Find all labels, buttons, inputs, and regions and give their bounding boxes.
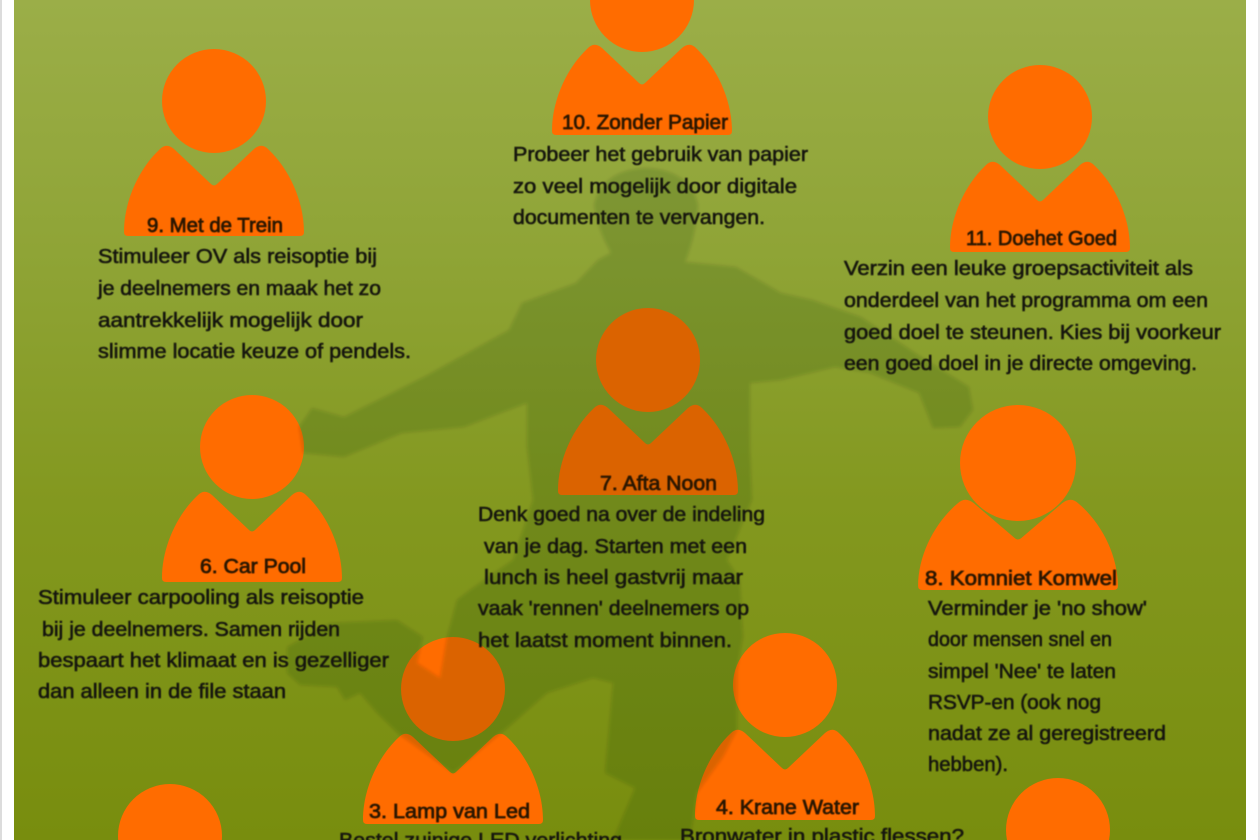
icon: person 9 <box>124 49 304 236</box>
text: tip 8: Verminder je 'no show' <box>928 598 1147 620</box>
text: tip 11 <box>844 258 1221 375</box>
text: tip 10: documenten te vervangen. <box>513 207 765 229</box>
text: tip 6: dan alleen in de file staan <box>38 681 286 703</box>
heading: 4. Krane Water: 4. Krane Water <box>716 797 859 819</box>
icon: person 10 <box>552 0 732 135</box>
text: tip 6: Stimuleer carpooling als reisoptie <box>38 587 364 609</box>
text: tip 7: Denk goed na over de indeling <box>478 504 765 526</box>
text: tip 8: RSVP-en (ook nog <box>928 692 1101 714</box>
heading: 3. Lamp van Led: 3. Lamp van Led <box>369 801 530 823</box>
text: tip 8: hebben). <box>928 754 1008 776</box>
text: tip 6: bespaart het klimaat en is gezelliger <box>38 650 389 672</box>
icon: person bottom left <box>118 784 222 840</box>
text: tip 9: je deelnemers en maak het zo <box>97 278 381 300</box>
silhouette: jumping figure <box>287 168 973 840</box>
heading: 7. Afta Noon: 7. Afta Noon <box>600 473 717 495</box>
text: tip 11: Verzin een leuke groepsactiviteit als <box>844 258 1193 280</box>
text: tip 10: Probeer het gebruik van papier <box>513 144 808 166</box>
text: tip 7: het laatst moment binnen. <box>478 630 732 652</box>
icon: person 8 <box>918 405 1118 590</box>
text: tip 9: aantrekkelijk mogelijk door <box>98 310 363 332</box>
text: tip 11: een goed doel in je directe omgeving. <box>844 353 1197 375</box>
text: tip 8: simpel 'Nee' te laten <box>928 661 1116 683</box>
text: tip 6 <box>38 587 389 703</box>
text: tip 10 <box>513 144 808 229</box>
heading: 6. Car Pool: 6. Car Pool <box>200 556 306 578</box>
text: tip 11: goed doel te steunen. Kies bij voorkeur <box>844 322 1221 344</box>
icon: person 3 <box>363 637 543 824</box>
heading: 10. Zonder Papier: 10. Zonder Papier <box>562 112 728 134</box>
text: tip 7 <box>478 504 765 652</box>
icon: person 11 <box>950 65 1130 252</box>
icon: person 7 <box>558 308 738 495</box>
text: tip 7: van je dag. Starten met een <box>484 536 747 558</box>
icon: person 6 <box>162 395 342 582</box>
text: tip 7: vaak 'rennen' deelnemers op <box>478 598 749 620</box>
icon: person bottom right <box>1006 778 1110 840</box>
text: tip 9 <box>97 246 411 363</box>
text: tip 8 <box>928 598 1166 776</box>
text: tip 11: onderdeel van het programma om een <box>844 290 1208 312</box>
heading: 9. Met de Trein: 9. Met de Trein <box>147 215 283 237</box>
heading: 11. Doehet Goed: 11. Doehet Goed <box>966 228 1117 250</box>
text: tip 8: nadat ze al geregistreerd <box>928 723 1166 745</box>
text: tip 7: lunch is heel gastvrij maar <box>484 567 743 589</box>
icon: person 4 <box>695 633 875 820</box>
text: tip 8: door mensen snel en <box>928 629 1112 651</box>
heading: 8. Komniet Komwel: 8. Komniet Komwel <box>925 568 1117 590</box>
text: tip 10: zo veel mogelijk door digitale <box>513 176 797 198</box>
text: tip 9: Stimuleer OV als reisoptie bij <box>98 246 377 268</box>
text: tip 9: slimme locatie keuze of pendels. <box>98 341 411 363</box>
text: tip 6: bij je deelnemers. Samen rijden <box>42 619 340 641</box>
